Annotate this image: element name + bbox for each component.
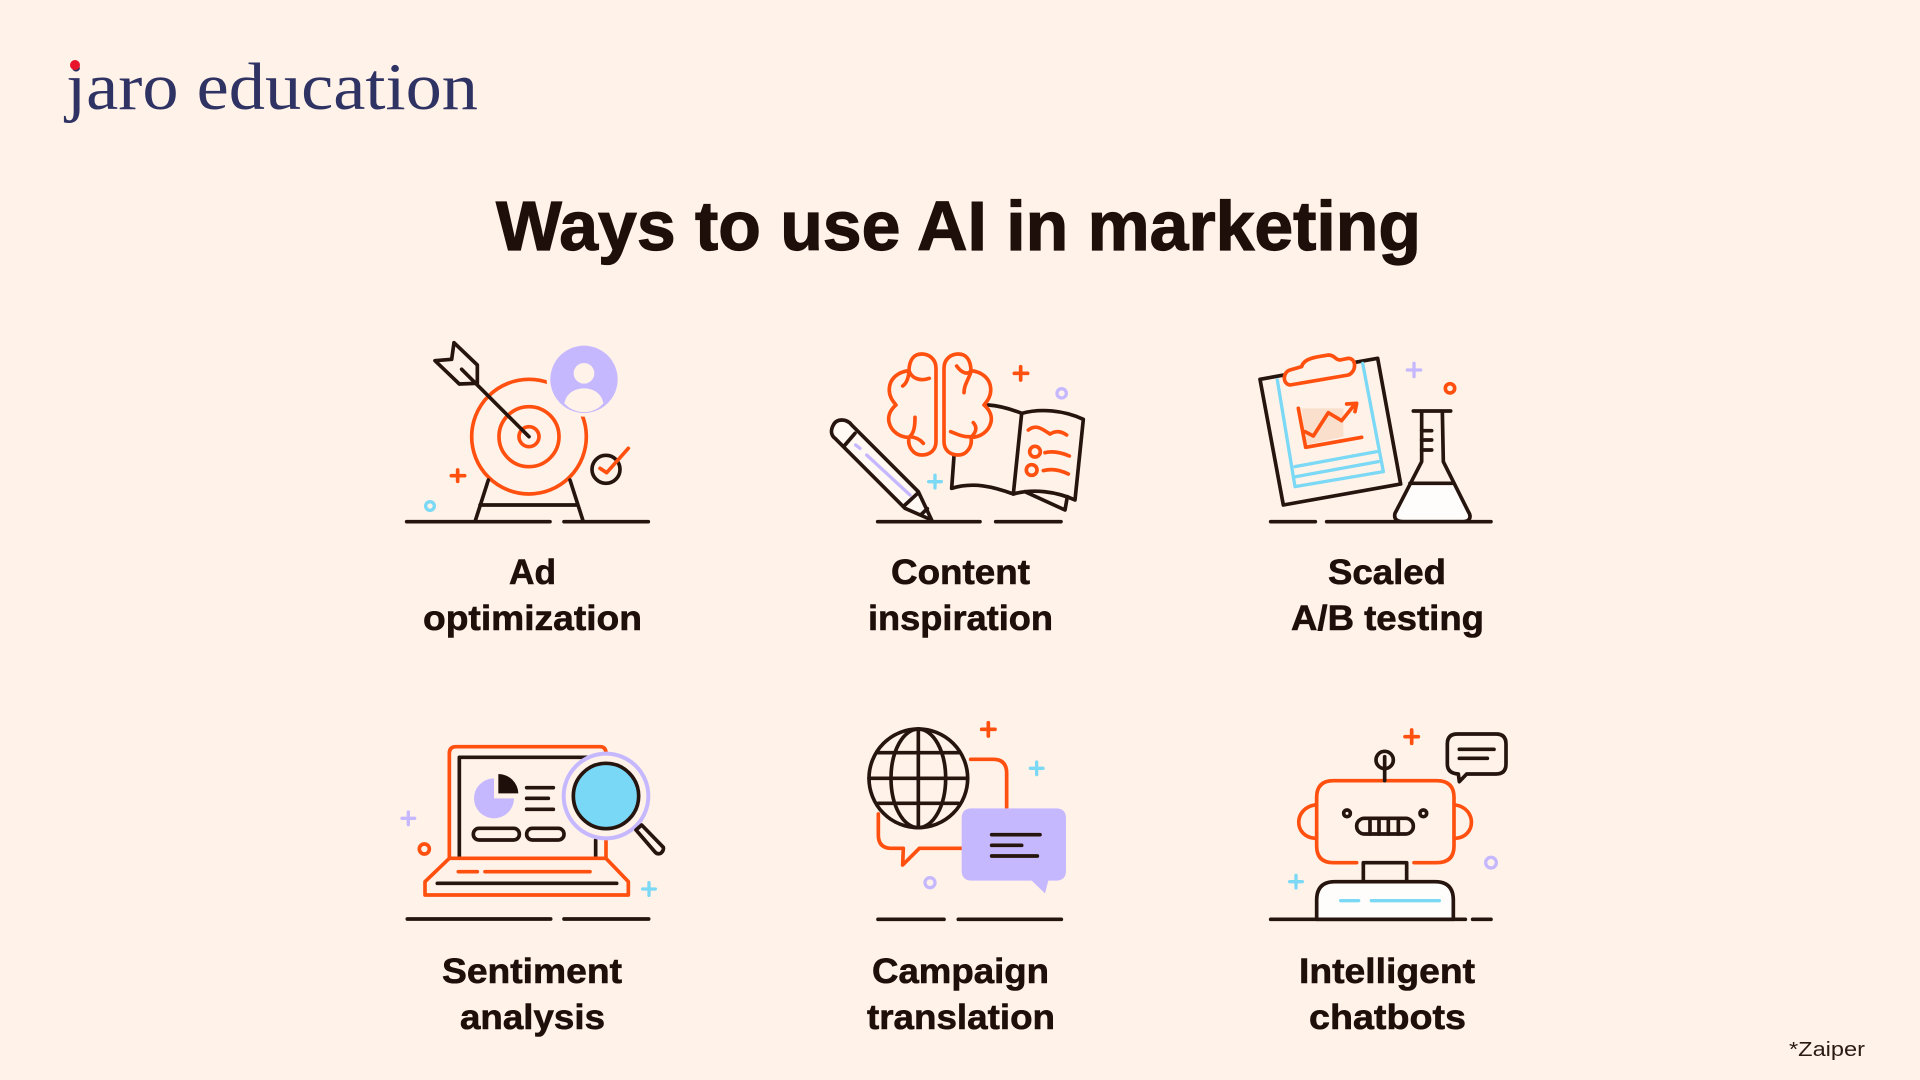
panel: scaled A/B testing bbox=[1260, 355, 1491, 638]
label: Intelligent chatbots: chatbots bbox=[1309, 998, 1466, 1037]
label: Intelligent chatbots bbox=[1299, 952, 1475, 1037]
label: Campaign translation: Campaign bbox=[872, 952, 1049, 991]
logo: jaro education: jaro education bbox=[64, 50, 478, 124]
icon: clipboard chart and flask bbox=[1260, 355, 1491, 522]
icon: laptop with magnifier bbox=[402, 747, 663, 919]
label: Campaign translation: translation bbox=[867, 998, 1055, 1037]
title: Ways to use AI in marketing bbox=[496, 187, 1421, 265]
label: Content inspiration bbox=[868, 553, 1053, 638]
label: Campaign translation bbox=[867, 952, 1055, 1037]
label: Scaled A/B testing: Scaled bbox=[1328, 553, 1446, 592]
icon: robot with speech bubble bbox=[1271, 730, 1506, 919]
label: Scaled A/B testing: A/B testing bbox=[1291, 599, 1484, 638]
label: Sentiment analysis: Sentiment bbox=[442, 952, 622, 991]
label: Ad optimization bbox=[423, 553, 642, 638]
label: Ad optimization: Ad bbox=[509, 553, 556, 592]
panel: ad optimization bbox=[407, 342, 648, 638]
label: Scaled A/B testing bbox=[1291, 553, 1484, 638]
panel: intelligent chatbots bbox=[1271, 730, 1506, 1037]
label: Ad optimization: optimization bbox=[423, 599, 642, 638]
panel: campaign translation bbox=[867, 723, 1066, 1037]
label: Content inspiration: inspiration bbox=[868, 599, 1053, 638]
panel: content inspiration bbox=[832, 354, 1083, 638]
panel: sentiment analysis bbox=[402, 747, 663, 1037]
label: Sentiment analysis: analysis bbox=[460, 998, 605, 1037]
icon: brain, pencil and book bbox=[832, 354, 1083, 522]
icon: target with arrow bbox=[407, 342, 648, 522]
icon: globe with speech bubbles bbox=[869, 723, 1066, 919]
source note: *Zaiper bbox=[1789, 1039, 1865, 1061]
label: Sentiment analysis bbox=[442, 952, 622, 1037]
label: Intelligent chatbots: Intelligent bbox=[1299, 952, 1475, 991]
label: Content inspiration: Content bbox=[891, 553, 1030, 592]
